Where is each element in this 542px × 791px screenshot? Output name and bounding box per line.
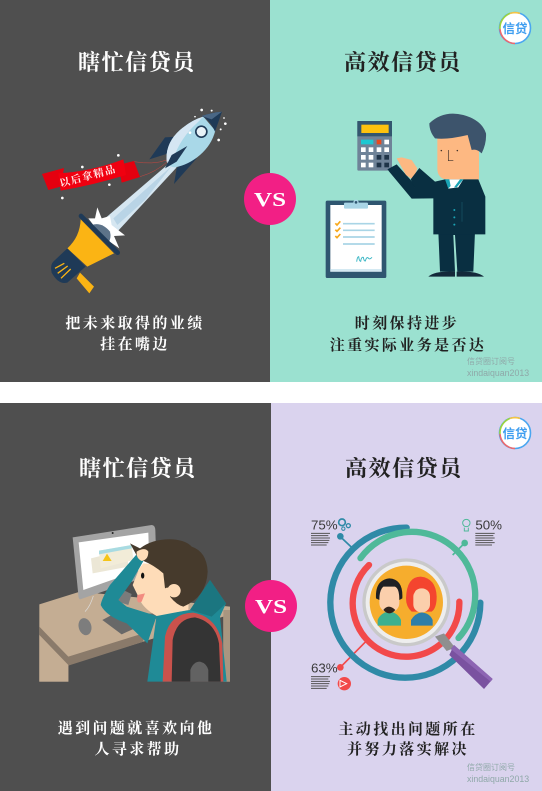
illustration: businessman with calculator and clipboard: [326, 114, 486, 278]
logo: bottom: 信贷: [502, 423, 528, 442]
caption: bottom right: [338, 718, 478, 759]
illustration: rocket launching from megaphone: [42, 109, 227, 293]
watermark: top: 信贷圈订阅号: [467, 356, 515, 366]
heading: bottom left: 瞎忙信贷员: [79, 452, 198, 483]
heading: top right: 高效信贷员: [344, 46, 463, 77]
illustration: magnifier infographic: [311, 518, 502, 690]
connectors: [337, 533, 468, 671]
stat: 50%: [463, 518, 502, 545]
watermark: bottom: 信贷圈订阅号: [467, 762, 515, 772]
caption: top right: 注重实际业务是否达: [330, 334, 486, 355]
stat: 75%: 75%: [311, 518, 338, 533]
heading: top left: 瞎忙信贷员: [78, 46, 197, 77]
caption: top left: 把未来取得的业绩: [65, 312, 205, 333]
man: [101, 539, 227, 682]
watermark: top: xindaiquan2013: [467, 368, 529, 378]
caption: bottom right: 并努力落实解决: [347, 738, 469, 759]
stars: [61, 109, 227, 199]
stat: 50%: 50%: [475, 518, 502, 533]
banner tether: [134, 160, 167, 177]
badge: top VS: [244, 173, 296, 225]
mouse and keyboard: [77, 596, 157, 637]
watermark: bottom: xindaiquan2013: [467, 774, 529, 784]
office chair: [163, 613, 223, 682]
rocket: [149, 112, 222, 184]
megaphone: [51, 216, 118, 293]
panel: top right efficient loan officer: [270, 0, 542, 382]
caption: bottom left: 遇到问题就喜欢向他: [58, 717, 214, 738]
caption: top left: 挂在嘴边: [100, 333, 170, 354]
exhaust beam: [105, 164, 177, 232]
caption: bottom left: [58, 717, 214, 759]
panel: top left busy loan officer: [0, 0, 270, 382]
businessman: [387, 114, 486, 277]
watermark: top: [467, 356, 529, 378]
blue ring: [330, 528, 480, 678]
logo: bottom: [499, 417, 531, 449]
badge: bottom VS: [245, 580, 297, 632]
caption: top right: 时刻保持进步: [355, 312, 459, 333]
logo: top: [499, 12, 531, 44]
woman portrait: [411, 612, 433, 626]
red ribbon banner: 以后拿精品: [58, 160, 118, 190]
watermark: bottom: [467, 762, 529, 784]
computer monitor: [73, 525, 157, 605]
man portrait: [378, 611, 401, 626]
calculator: [357, 121, 392, 171]
desk: [39, 592, 230, 682]
caption: top left: [65, 312, 205, 354]
caption: bottom right: 主动找出问题所在: [338, 718, 478, 739]
badge: bottom VS: VS: [255, 596, 287, 618]
illustration: stressed man at computer: [39, 525, 230, 682]
panel: bottom left busy loan officer: [0, 403, 271, 791]
clipboard: [326, 200, 386, 278]
badge: top VS: VS: [254, 189, 286, 211]
spark: [88, 207, 125, 248]
heading: bottom right: 高效信贷员: [345, 452, 464, 483]
stat: 63%: 63%: [311, 661, 338, 676]
red ribbon banner: [42, 159, 140, 191]
caption: top right: [330, 312, 486, 355]
caption: bottom left: 人寻求帮助: [94, 738, 182, 759]
logo: top: 信贷: [502, 18, 528, 37]
stat: 75%: [311, 518, 350, 545]
stat: 63%: [311, 661, 351, 690]
green ring: [360, 532, 475, 638]
panel: bottom right efficient loan officer: [271, 403, 542, 791]
magnifier with portraits: [362, 558, 493, 689]
red ring: [353, 565, 459, 657]
